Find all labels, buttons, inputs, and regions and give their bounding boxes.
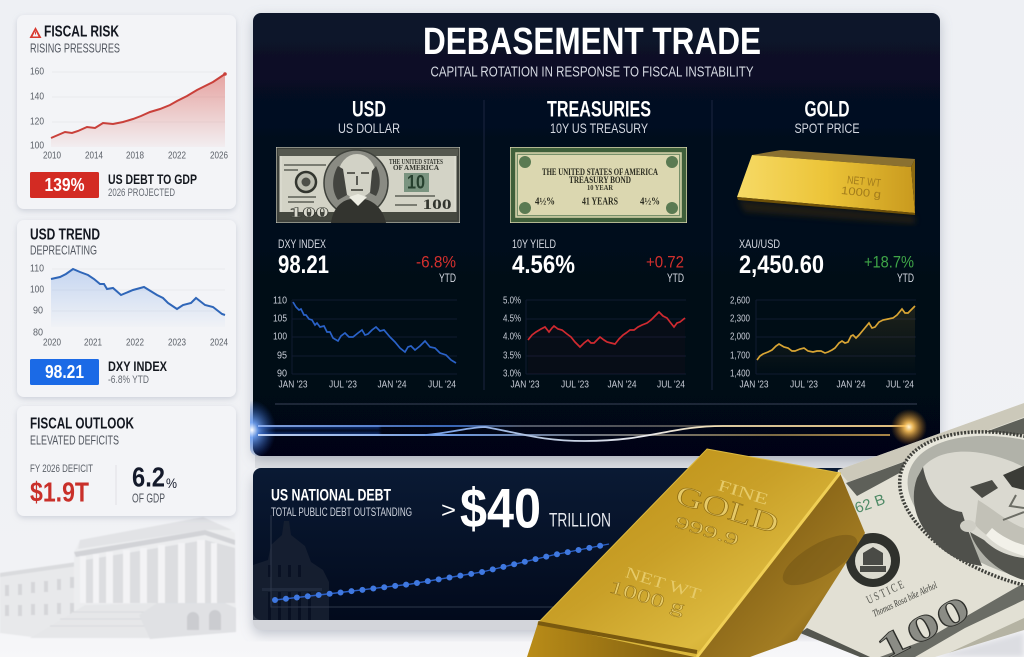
metric label: xau/usd: XAU/USD — [739, 237, 780, 251]
dotted line chart: debt growth — [271, 515, 609, 607]
title: DEBASEMENT TRADE — [423, 21, 761, 63]
area chart: debt to gdp: 140 — [30, 92, 44, 102]
change: +0.72: +0.72 — [646, 252, 684, 272]
subheading: 10y us treasury: 10Y US TREASURY — [550, 120, 648, 136]
value: greater than $40 trillion — [441, 476, 611, 540]
area chart: debt to gdp — [30, 66, 228, 162]
badge: 98.21: 98.21 — [45, 362, 84, 382]
illustration: stack of hundred dollar bills — [790, 400, 1024, 657]
line chart: yield: 3.5% — [503, 350, 521, 362]
serial number: 62 B — [853, 491, 887, 517]
line chart: dxy — [273, 296, 457, 390]
area chart: usd trend: 2020 — [43, 338, 61, 348]
engraved text: 1000 g: 1000 g — [607, 577, 688, 620]
subheading: total public debt outstanding: TOTAL PUBLIC DEBT OUTSTANDING — [271, 505, 412, 519]
line chart: gold price: JAN '23 — [740, 380, 769, 390]
label: of gdp: OF GDP — [132, 490, 165, 506]
badge: 98.21 — [30, 359, 99, 385]
column: treasuries — [503, 96, 687, 390]
illustration: capitol silhouette — [253, 521, 329, 620]
illustration: hundred dollar note: 100 — [289, 205, 329, 221]
illustration: hundred dollar note: OF AMERICA — [393, 164, 439, 172]
label: fy 2026 deficit: FY 2026 DEFICIT — [30, 463, 93, 475]
area chart: usd trend: 2023 — [168, 338, 186, 348]
value: 6.2%: % — [166, 475, 177, 491]
panel: fiscal outlook — [17, 406, 236, 516]
line chart: yield: JUL '24 — [657, 380, 685, 390]
line chart: gold price: JUL '24 — [886, 380, 914, 390]
panel: fiscal risk — [17, 15, 236, 209]
label: ytd: YTD — [439, 271, 456, 285]
line chart: gold price: 1,700 — [730, 350, 750, 362]
area chart: debt to gdp: 2014 — [85, 150, 103, 162]
illustration: large gold bar — [527, 449, 865, 657]
heading: usd: USD — [352, 96, 386, 122]
label: us debt to gdp: US DEBT TO GDP — [108, 171, 197, 187]
area chart: debt to gdp: 120 — [30, 116, 44, 128]
area chart: debt to gdp: 100 — [30, 140, 44, 152]
graphic: light stream from dollar to gold — [250, 401, 926, 456]
value: 6.2%: 6.2 — [132, 462, 165, 492]
metric value: 98.21: 98.21 — [278, 251, 329, 279]
illustration: treasury bond: 41 YEARS — [582, 196, 618, 208]
heading: fiscal risk: FISCAL RISK — [44, 24, 119, 40]
bill lettering — [866, 580, 968, 657]
line chart: yield: JAN '23 — [510, 380, 540, 390]
area chart: usd trend: 90 — [33, 306, 43, 316]
area chart: usd trend: 2024 — [210, 338, 228, 348]
area chart: usd trend — [30, 264, 228, 348]
line chart: gold price: 1,400 — [730, 368, 750, 380]
area chart: debt to gdp: 2022 — [168, 150, 186, 162]
bill portrait — [898, 430, 1024, 586]
badge: 139%: 139% — [44, 175, 84, 195]
illustration: hundred dollar note: 10 — [407, 172, 425, 194]
line chart: yield — [503, 296, 686, 390]
value: greater than $40 trillion: TRILLION — [549, 510, 611, 532]
line chart: dxy: 90 — [277, 368, 287, 380]
icon: warning triangle — [30, 27, 42, 38]
label: ytd: YTD — [667, 271, 684, 285]
area chart: usd trend: 100 — [30, 284, 44, 296]
line chart: gold price — [730, 296, 916, 390]
change: +18.7%: +18.7% — [864, 252, 914, 272]
label: 2026 projected: 2026 PROJECTED — [108, 187, 175, 199]
label: ytd: YTD — [897, 271, 914, 285]
label: dxy index: DXY INDEX — [108, 358, 168, 374]
bill treasury seal — [846, 533, 900, 587]
illustration: treasury bond: 4½% — [640, 196, 660, 208]
line chart: dxy: 95 — [277, 350, 287, 362]
bill lettering: Thomas Rosa bike Akrhol — [871, 580, 939, 620]
illustration: hundred dollar note — [276, 147, 460, 223]
line chart: yield: 4.5% — [503, 314, 521, 324]
label: ytd change: -6.8% YTD — [108, 374, 149, 386]
panel: debasement trade main — [228, 13, 940, 468]
column: usd — [273, 96, 460, 390]
heading: gold: GOLD — [804, 96, 850, 122]
line chart: gold price: JUL '23 — [790, 380, 818, 390]
line chart: dxy: 100 — [273, 332, 287, 342]
value: $1.9T: $1.9T — [30, 476, 89, 508]
heading: usd trend: USD TREND — [30, 226, 100, 244]
engraved text: gold: GOLD — [672, 480, 782, 540]
value: greater than $40 trillion: $40 — [460, 476, 541, 540]
line chart: dxy: JUL '23 — [329, 380, 357, 390]
panel: usd trend — [17, 220, 236, 397]
area chart: debt to gdp: 2018 — [126, 150, 144, 162]
line chart: dxy: 110 — [273, 296, 287, 306]
illustration: treasury bond: 10 YEAR — [587, 184, 614, 192]
engraved text: 999.9: 999.9 — [673, 512, 741, 550]
metric value: 2,450.60: 2,450.60 — [739, 251, 824, 279]
illustration: treasury bond — [510, 147, 687, 223]
subheading: depreciating: DEPRECIATING — [30, 242, 97, 258]
line chart: dxy: 105 — [273, 314, 287, 324]
line chart: dxy: JAN '24 — [378, 380, 407, 390]
panel: us national debt — [253, 468, 940, 630]
subheading: spot price: SPOT PRICE — [794, 120, 860, 136]
heading: treasuries: TREASURIES — [547, 96, 651, 122]
line chart: dxy: JAN '23 — [278, 380, 308, 390]
area chart: usd trend: 2021 — [84, 338, 102, 348]
illustration: treasury bond: THE UNITED STATES OF AMERICA — [542, 167, 658, 177]
value: greater than $40 trillion: > — [441, 498, 456, 522]
line chart: gold price: 2,600 — [730, 296, 750, 306]
badge: 139% — [30, 172, 99, 198]
subheading: us dollar: US DOLLAR — [338, 120, 400, 136]
line chart: gold price: 2,300 — [730, 314, 750, 324]
area chart: debt to gdp: 2026 — [210, 150, 228, 162]
metric label: dxy index: DXY INDEX — [278, 237, 326, 251]
engraved text: fine: FINE — [716, 477, 770, 509]
subtitle: CAPITAL ROTATION IN RESPONSE TO FISCAL INSTABILITY — [430, 64, 754, 80]
illustration: hundred dollar note: THE UNITED STATES — [389, 158, 443, 166]
metric value: 4.56%: 4.56% — [512, 251, 575, 279]
line chart: yield: 3.0% — [503, 368, 521, 380]
illustration: small gold bar: NET WT — [846, 174, 882, 190]
area chart: usd trend: 110 — [30, 264, 44, 274]
line chart: dxy: JUL '24 — [428, 380, 456, 390]
illustration: treasury bond: 4½% — [535, 196, 555, 208]
line chart: yield: 5.0% — [503, 296, 521, 306]
line chart: yield: 4.0% — [503, 332, 521, 342]
illustration: small gold bar: 1000 g — [840, 185, 882, 201]
bill lettering: U S T I C E — [864, 577, 906, 607]
illustration: small gold bar — [737, 150, 915, 224]
area chart: usd trend: 80 — [33, 328, 43, 338]
area chart: debt to gdp: 160 — [30, 66, 44, 78]
illustration: treasury bond: TREASURY BOND — [569, 175, 631, 185]
area chart: debt to gdp: 2010 — [43, 150, 61, 162]
line chart: gold price: JAN '24 — [836, 380, 866, 390]
line chart: gold price: 2,000 — [730, 332, 750, 342]
illustration: hundred dollar note: 100 — [422, 197, 452, 213]
line chart: yield: JAN '24 — [608, 380, 637, 390]
line chart: yield: JUL '23 — [561, 380, 589, 390]
subheading: elevated deficits: ELEVATED DEFICITS — [30, 432, 119, 448]
metric label: 10y yield: 10Y YIELD — [512, 237, 556, 251]
subheading: rising pressures: RISING PRESSURES — [30, 40, 120, 56]
area chart: usd trend: 2022 — [126, 338, 144, 348]
heading: fiscal outlook: FISCAL OUTLOOK — [30, 416, 134, 432]
heading: us national debt: US NATIONAL DEBT — [271, 486, 391, 504]
change: -6.8%: -6.8% — [416, 252, 456, 272]
illustration: capitol building — [0, 517, 236, 639]
engraved text: net wt: NET WT — [623, 564, 703, 604]
column: gold — [730, 96, 916, 390]
